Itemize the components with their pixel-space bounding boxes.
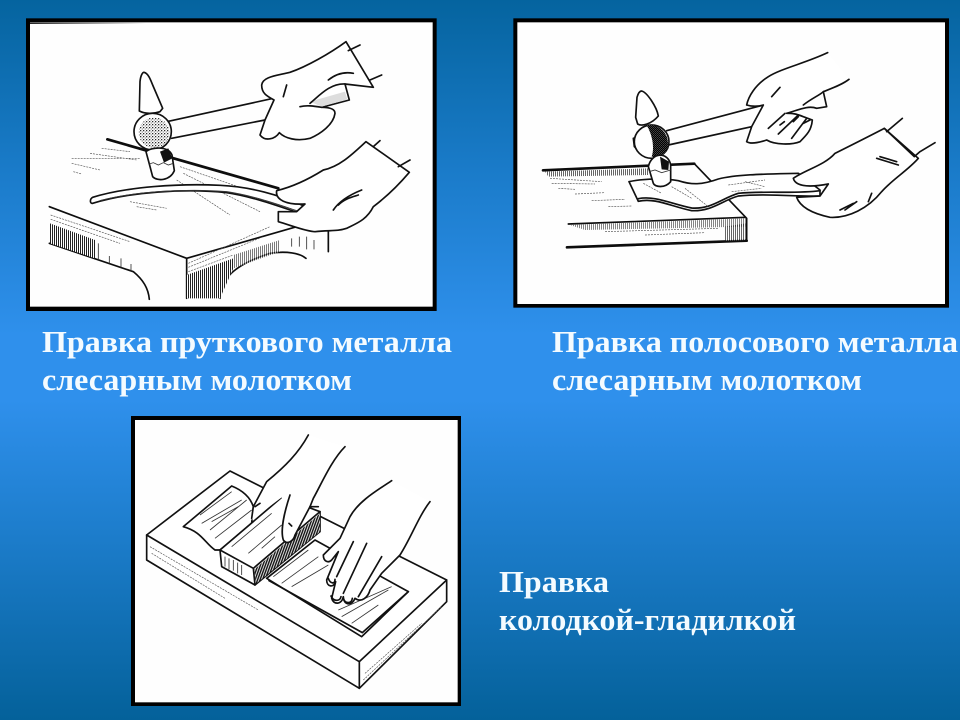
illustration: workbench — [49, 139, 328, 299]
icon: upper hand gripping the handle — [260, 42, 382, 140]
icon: left hand on the block — [252, 435, 345, 542]
icon: lower hand holding the bar — [277, 141, 410, 232]
illustration: workbench — [543, 164, 747, 247]
caption: bar metal: Правка пруткового металла — [42, 324, 453, 359]
illustration: left metal sheet — [183, 486, 253, 550]
caption: strip metal: Правка полосового металла — [552, 324, 959, 359]
panel frame — [131, 416, 461, 706]
panel: straightening with a smoothing block — [131, 416, 461, 706]
illustration: bent bar — [90, 185, 304, 213]
panel: straightening bar metal with a hammer — [26, 18, 437, 311]
icon: hammer — [633, 91, 763, 187]
illustration: right metal sheet — [267, 540, 408, 637]
illustration: wooden board — [147, 471, 447, 688]
caption: bar metal, second line: слесарным молотком — [42, 362, 352, 397]
icon: lower hand holding the strip — [793, 118, 935, 217]
caption: smoothing block, second line: колодкой-гладилкой — [499, 602, 796, 637]
illustration: smoothing block — [220, 497, 320, 585]
caption: strip metal, second line: слесарным молотком — [552, 362, 862, 397]
icon: right hand on the sheet — [323, 481, 430, 604]
icon: hammer — [134, 72, 273, 180]
panel: straightening strip metal with a hammer — [513, 18, 949, 308]
panel frame — [513, 18, 949, 308]
icon: upper hand gripping the handle — [747, 53, 849, 144]
caption: smoothing block: Правка — [499, 564, 610, 599]
panel frame — [26, 18, 437, 311]
illustration: wavy metal strip — [629, 173, 820, 211]
